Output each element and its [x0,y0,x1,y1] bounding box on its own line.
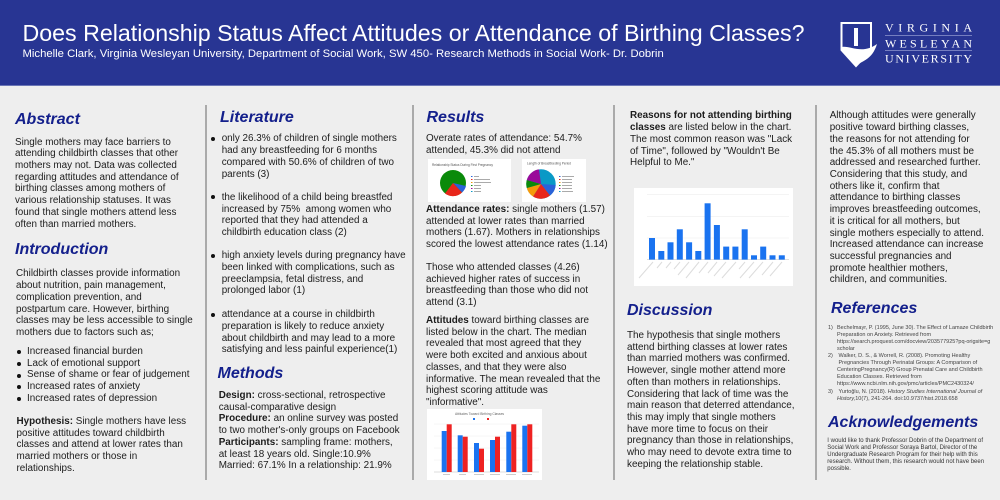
acknowledgements text: I would like to thank Professor Dobrin of the Department of [827,438,983,444]
discussion text: pregnancy than those in relationships, [627,435,793,446]
literature list: about childbirth and may lead to a more [222,333,395,344]
conclusion text: positive toward birthing classes, [830,122,969,133]
pie chart: breastfeeding period [522,159,586,202]
attitudes text: highest scoring attitude was [426,385,548,396]
introduction text [16,268,193,338]
conclusion text: successful pregnancies and [830,251,952,262]
abstract text: attending childbirth classes that other [15,148,178,159]
heading: literature: Literature [220,109,294,126]
discussion text [627,330,794,470]
conclusion text: Considering that this study, and [830,169,967,180]
conclusion text: improves breastfeeding outcomes, [830,204,981,215]
references list: https://search.proquest.com/docview/203577925?pq-origsite=g [837,339,990,345]
title: Does Relationship Status Affect Attitudes or Attendance of Birthing Classes? [22,20,804,46]
conclusion text: Although attitudes were generally [830,110,976,121]
conclusion text [830,110,984,285]
conclusion text: children, and communities. [830,274,947,285]
attitudes text: were both excited and anxious about [426,350,587,361]
abstract text: found that single mothers attend less [15,207,176,218]
attendance rates text: Attendance rates: single mothers (1.57) [426,204,605,215]
logo: university wordmark [885,20,972,66]
methods text: causal-comparative design [219,402,336,413]
discussion text: this may imply that single mothers [627,412,776,423]
references list: Bechelmayr, P. (1995, June 30). The Effect of Lamaze Childbirth [837,324,993,330]
acknowledgements text: Social Work and Professor Soraya Bartol, Director of the [827,445,977,451]
references list: 2) [828,353,833,359]
heading: acknowledgements: Acknowledgements [828,414,978,431]
conclusion text: the 45.3% of all mothers must be [830,146,974,157]
discussion text: Considering that lack of time was the [627,389,788,400]
references list: Yurtoğlu, N. (2018). History Studies International Journal of [838,389,982,395]
risk factor list: Sense of shame or fear of judgement [27,369,189,380]
risk factor list [17,346,190,404]
literature list: preeclampsia, fetal distress, and [222,274,363,285]
introduction text: mothers due to factors such as; [16,327,154,338]
references list: Preparation on Anxiety. Retrieved from [837,332,931,338]
results overview: attended, 45.3% did not attend [426,145,561,156]
bar chart: attitudes toward birthing classes: Attitudes Toward Birthing Classes [455,412,504,416]
conclusion text: it is critical for all mothers, but [830,216,960,227]
discussion text: attend birthing classes at lower rates [627,342,787,353]
success text: attend (3.1) [426,297,477,308]
abstract text: Single mothers may face barriers to [15,136,171,148]
risk factor list: Increased rates of anxiety [27,381,140,392]
attitudes text: Attitudes toward birthing classes are [426,315,589,326]
success text [426,262,588,308]
attitudes text [426,315,600,408]
methods text: at least 18 years old. Single:10.9% [219,449,371,460]
abstract text: regarding attitudes and attendance of [15,172,179,183]
header banner [0,0,1000,86]
heading: discussion: Discussion [627,302,712,319]
success text: Those who attended classes (4.26) [426,262,580,273]
literature list: had any breastfeeding for 6 months [222,145,377,156]
conclusion text: the reasons for not attending for [830,134,970,145]
pie chart: relationship status: Relationship Status During First Pregnancy [432,163,493,167]
methods text: Procedure: an online survey was posted [219,413,398,424]
reasons text: of Time", followed by "Wouldn't Be [630,146,780,157]
hypothesis: positive attitudes toward childbirth [16,428,165,439]
introduction text: postpartum care. However, birthing [16,304,169,315]
abstract text [15,136,179,230]
results overview: Overate rates of attendance: 54.7% [426,133,582,144]
attitudes text: revealed that most agreed that they [426,338,581,349]
reasons text: Reasons for not attending birthing [630,110,792,121]
hypothesis: Hypothesis: Single mothers have less [16,416,186,427]
success text: achieved higher rates of success in [426,274,580,285]
discussion text: who may need to devote extra time to [627,447,792,458]
acknowledgements text [827,438,984,472]
discussion text: often than mothers in relationships. [627,377,781,388]
literature list: increased by 75% among women who [222,204,391,214]
reasons text: The most common reason was "Lack [630,134,792,145]
conclusion text: addressed and researched further. [830,157,981,168]
logo: university shield [840,22,877,68]
abstract text: birthing classes among mothers of [15,183,165,194]
conclusion text: attendance to birthing classes [830,192,960,203]
references list: Education Classes. Retrieved from [837,374,922,380]
attendance rates text [426,204,608,250]
literature list: prolonged labor (1) [222,285,305,296]
abstract text: mothers may not. Data was collected [15,160,177,171]
abstract text: various relationship statuses. It was [15,195,171,206]
literature list: the likelihood of a child being breastfed [222,192,392,203]
abstract text: often than married mothers. [15,219,136,230]
hypothesis: married mothers or those in [16,451,137,462]
logo: university wordmark: WESLEYAN [885,36,972,50]
bar chart: attitudes toward birthing classes [427,409,542,480]
reasons text: classes are listed below in the chart. [630,122,791,133]
attendance rates text: attended at lower rates than married [426,216,585,227]
conclusion text: Increased attendance can increase [830,239,983,250]
introduction text: classes may be less accessible to single [16,315,193,326]
introduction text: complication prevention, and [16,292,142,303]
references list: Walker, D. S., & Worrell, R. (2008). Promoting Healthy [838,353,970,359]
heading: introduction: Introduction [15,241,108,258]
authors: Michelle Clark, Virginia Wesleyan University, Department of Social Work, SW 450- Research Methods in Social Work- Dr. Dobrin [22,48,664,60]
literature list: satisfying and less painful experience(1) [222,344,397,355]
bar chart: reasons for not attending [634,188,793,286]
reasons text [630,110,792,168]
references list: https://www.ncbi.nlm.nih.gov/pmc/articles/PMC2430324/ [837,381,974,387]
literature list [211,133,406,355]
references list: 1) [828,324,833,330]
discussion text: However, single mother attend more [627,365,786,376]
hypothesis [16,416,186,474]
references list: CenteringPregnancy(R) Group Prenatal Care and Childbirth [837,367,983,373]
acknowledgements text: Undergraduate Research Program for their help with this [827,452,978,458]
introduction text: about nutrition, pain management, [16,280,166,291]
discussion text: main reason that deterred attendance, [627,400,794,411]
discussion text: The hypothesis that single mothers [627,330,780,341]
literature list: been linked with complications, such as [222,262,395,273]
hypothesis: classes and attend at lower rates than [16,439,183,450]
heading: results: Results [426,109,484,126]
conclusion text: promote healthier mothers, [830,263,948,274]
risk factor list: Increased financial burden [27,346,143,357]
acknowledgements text: possible. [827,466,851,472]
risk factor list: Lack of emotional support [27,358,140,369]
conclusion text: single mothers especially to attend. [830,228,984,239]
discussion text: have more time to focus on their [627,424,768,435]
attendance rates text: mothers (1.67). Mothers in relationships [426,227,600,238]
results overview [426,133,582,156]
success text: breastfeeding than those who did not [426,285,588,296]
attitudes text: classes, and that they were also [426,362,567,373]
references list: scholar [837,346,855,352]
pie chart: breastfeeding period: Length of Breastfeeding Period [526,162,571,166]
acknowledgements text: research. Without them, this research would not have been [827,459,984,465]
references list: Pregnancies Through Perinatal Groups: A Comparison of [838,360,977,366]
risk factor list: Increased rates of depression [27,393,157,404]
methods text [218,390,400,471]
literature list: childbirth education class (2) [222,227,347,238]
references list: 3) [828,389,833,395]
literature list: preparation is likely to reduce anxiety [222,321,384,332]
methods text: Married: 67.1% In a relationship: 21.9% [219,460,392,471]
attitudes text: informative. The mean revealed that the [426,374,600,385]
methods text: Participants: sampling frame: mothers, [219,437,393,448]
introduction text: Childbirth classes provide information [16,268,180,279]
pie chart: relationship status [428,159,511,202]
literature list: high anxiety levels during pregnancy have [222,250,406,261]
heading: abstract: Abstract [15,111,80,128]
logo: university wordmark: UNIVERSITY [885,52,972,66]
attendance rates text: scored the lowest attendance rates (1.14) [426,239,608,250]
literature list: compared with 50.6% of children of two [222,157,394,168]
discussion text: than married mothers was confirmed. [627,353,790,364]
hypothesis: relationships. [16,463,75,474]
heading: references: References [831,300,917,317]
literature list: only 26.3% of children of single mothers [222,133,397,144]
reasons text: Helpful to Me." [630,157,694,168]
methods text: Design: cross-sectional, retrospective [219,390,386,401]
heading: methods: Methods [218,365,283,382]
references list [828,324,993,402]
logo: university wordmark: VIRGINIA [885,20,972,34]
literature list: parents (3) [222,169,269,180]
attitudes text: "informative". [426,397,484,408]
methods text: to two mother's-only groups on Facebook [219,425,400,436]
literature list: attendance at a course in childbirth [222,309,375,320]
discussion text: keeping the relationship stable. [627,459,763,470]
references list: History,10(7), 241-264. doi:10.9737/hist.2018.658 [837,396,958,402]
attitudes text: listed below in the chart. The median [426,327,587,338]
literature list: reported that they had attended a [222,215,368,226]
conclusion text: others like it, confirm that [830,181,939,192]
